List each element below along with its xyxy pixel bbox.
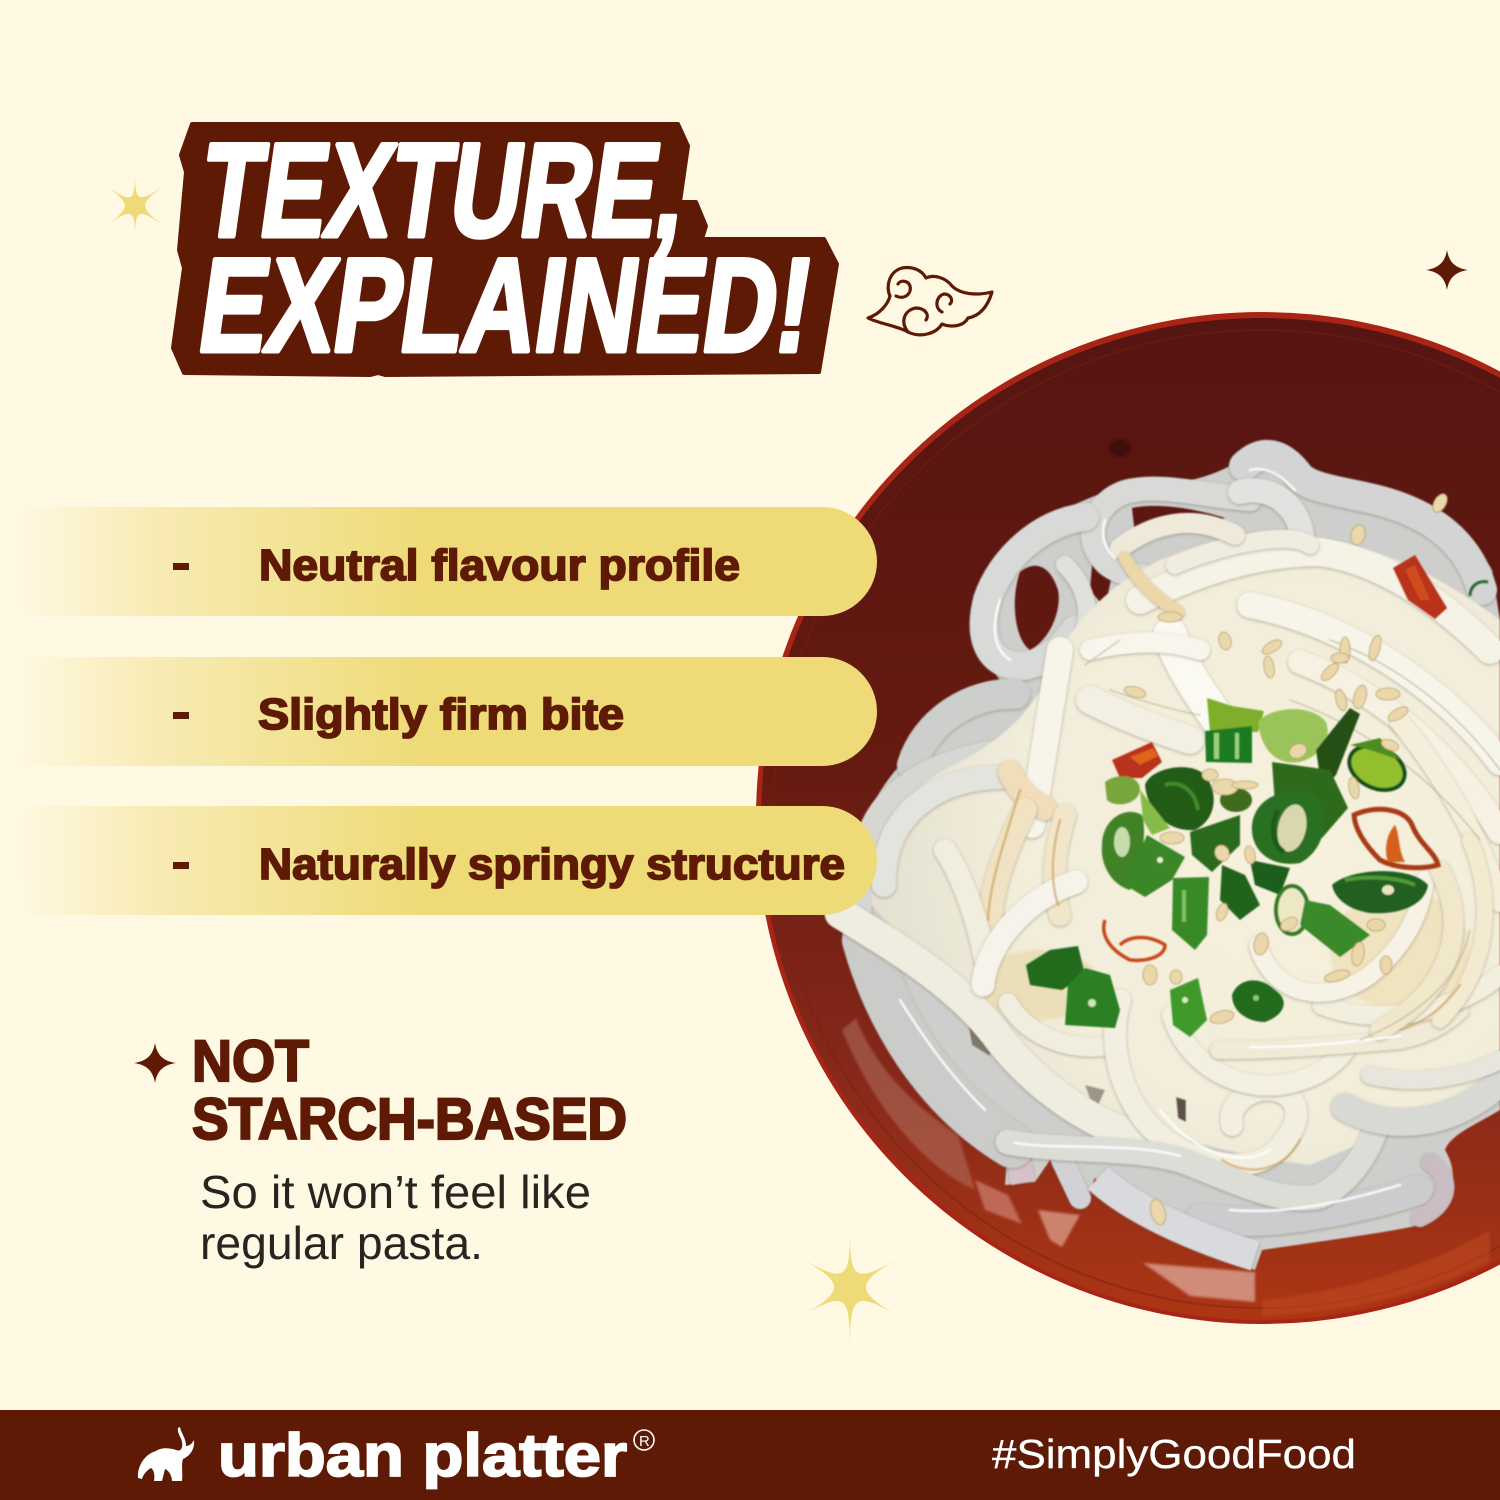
feature bar 1: Neutral flavour profile xyxy=(259,541,740,590)
dark gaps xyxy=(968,1022,990,1056)
feature bar 1 xyxy=(0,507,877,616)
title outline xyxy=(173,124,837,375)
main noodles xyxy=(840,523,1500,1198)
registered mark: R xyxy=(639,1433,650,1450)
warm centre xyxy=(980,950,1100,1020)
feature bar 3 xyxy=(0,806,877,915)
hashtag: #SimplyGoodFood xyxy=(992,1431,1356,1477)
icon: elephant xyxy=(138,1427,194,1481)
icon: cloud xyxy=(868,267,992,335)
registered mark xyxy=(634,1430,654,1450)
callout: not starch-based: STARCH-BASED xyxy=(192,1087,627,1152)
outer translucent noodles xyxy=(856,455,1482,1256)
title text: TEXTURE, xyxy=(193,117,696,265)
callout: not starch-based: regular pasta. xyxy=(200,1217,483,1269)
callout: not starch-based: So it won’t feel like xyxy=(200,1166,591,1218)
logo wordmark: urban platter xyxy=(218,1422,627,1489)
noodle mass backing xyxy=(845,452,1500,1270)
title xyxy=(173,117,837,380)
toppings: green onions, chilli, sesame xyxy=(1026,491,1488,1226)
noodles xyxy=(840,452,1500,1270)
bowl reflections xyxy=(842,439,1490,1316)
bowl xyxy=(756,312,1500,1324)
sparkle: gold small xyxy=(103,170,167,241)
sparkle: gold large xyxy=(795,1228,905,1352)
callout: not starch-based: NOT xyxy=(192,1029,309,1094)
footer xyxy=(0,1410,1500,1500)
bowl of noodles photo xyxy=(756,312,1500,1324)
callout: not starch-based xyxy=(192,1029,627,1269)
title: EXPLAINED! xyxy=(191,232,822,380)
feature bar 3: Naturally springy structure xyxy=(259,840,845,889)
feature bar 2: Slightly firm bite xyxy=(258,690,624,739)
sparkle: brown top right xyxy=(1426,250,1468,290)
feature bar 2 xyxy=(0,657,877,766)
noodle highlights xyxy=(900,469,1400,1211)
sparkle: brown bullet xyxy=(134,1043,176,1083)
noodle base xyxy=(872,533,1500,1165)
